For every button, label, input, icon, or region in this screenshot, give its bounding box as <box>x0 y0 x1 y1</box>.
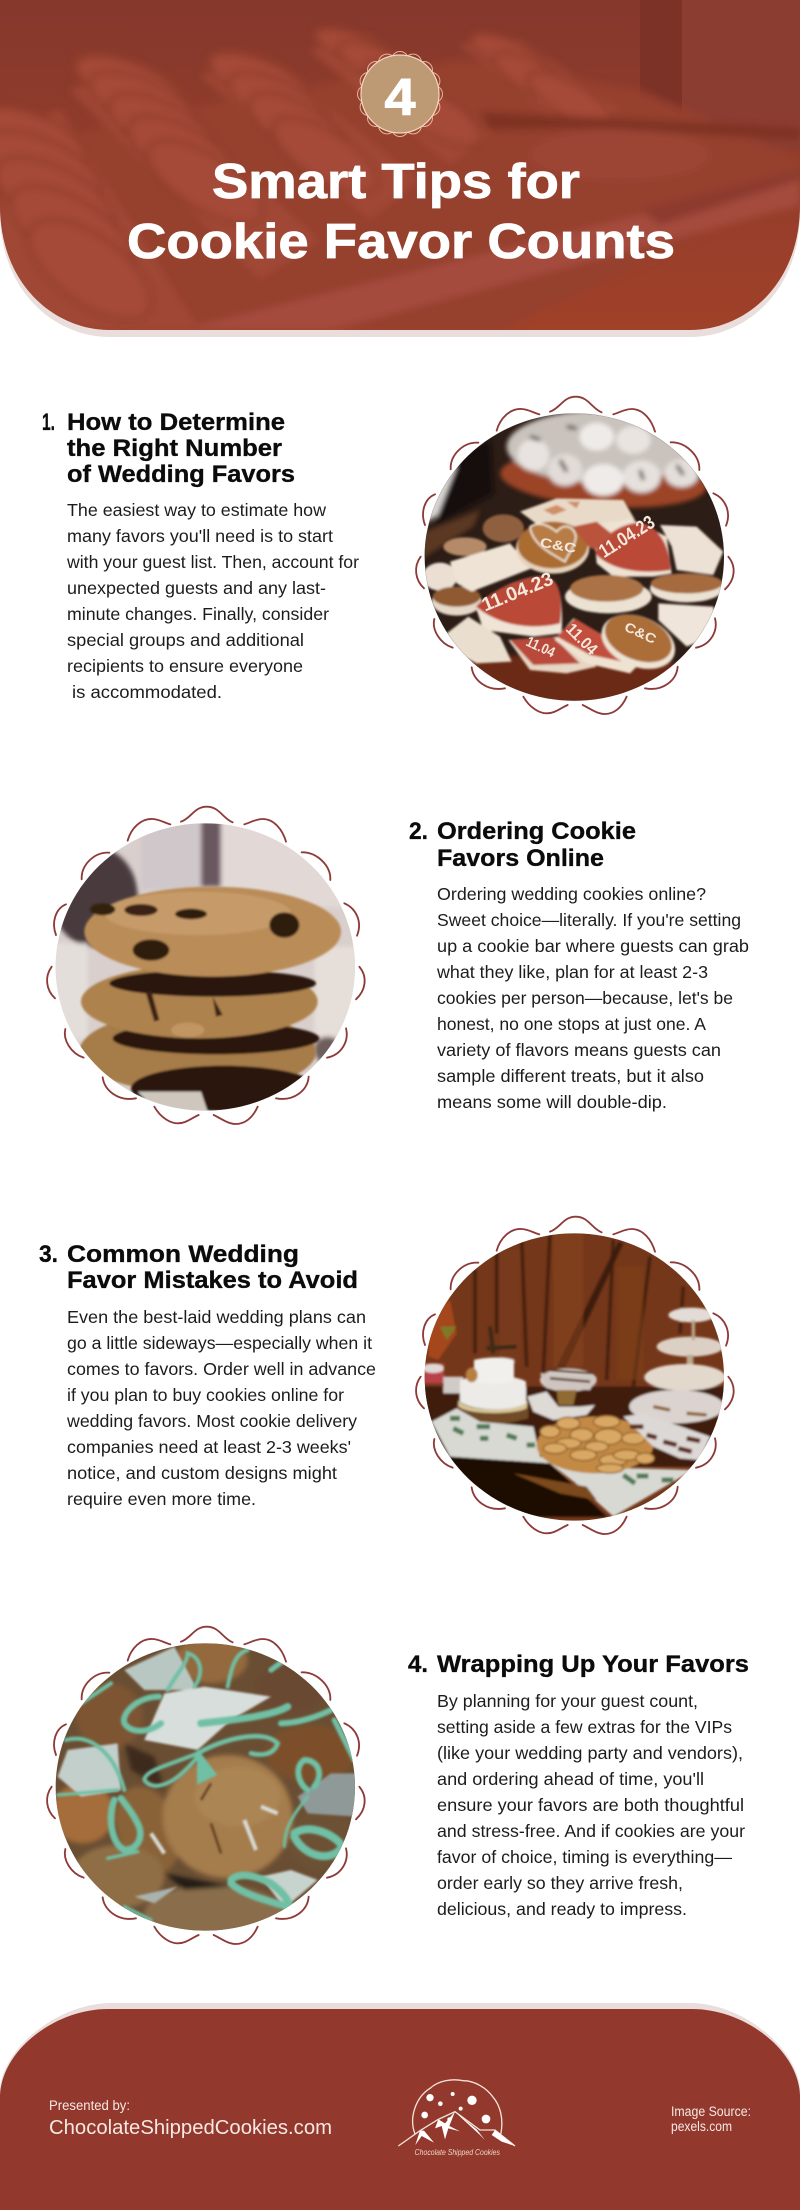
heading 4: 4. <box>408 1651 428 1678</box>
photo 1: decorated wedding cookies: 11.04 <box>523 634 558 662</box>
heading 1: of Wedding Favors <box>67 461 295 488</box>
body 3: require even more time. <box>67 1489 256 1509</box>
body 3: if you plan to buy cookies online for <box>67 1385 344 1405</box>
photo 3: wedding dessert table <box>416 1217 734 1534</box>
image source: Image Source: <box>671 2104 751 2119</box>
body 4: By planning for your guest count, <box>437 1691 698 1711</box>
photo 1: decorated wedding cookies: C&C <box>622 619 659 647</box>
body 2: variety of flavors means guests can <box>437 1040 721 1060</box>
body 1: The easiest way to estimate how <box>67 500 326 520</box>
body 1: is accommodated. <box>72 682 222 702</box>
photo 1: decorated wedding cookies <box>416 397 734 714</box>
body 2: honest, no one stops at just one. A <box>437 1014 706 1034</box>
section 2 text <box>409 818 749 1112</box>
section 1 text <box>42 409 359 702</box>
photo 1: decorated wedding cookies: 11.04.23 <box>479 569 557 616</box>
heading 1 <box>42 409 295 488</box>
body 4: ensure your favors are both thoughtful <box>437 1795 744 1815</box>
image source: pexels.com <box>671 2119 732 2134</box>
body 1 <box>66 500 359 702</box>
number badge: 4 <box>384 69 416 127</box>
footer <box>0 2003 800 2210</box>
heading 1: How to Determine <box>67 409 285 436</box>
body 4: (like your wedding party and vendors), <box>437 1743 743 1763</box>
heading 3: 3. <box>39 1241 58 1268</box>
body 3: go a little sideways—especially when it <box>67 1333 372 1353</box>
title <box>127 155 675 269</box>
body 1: recipients to ensure everyone <box>67 656 303 676</box>
body 4 <box>437 1691 745 1919</box>
body 1: with your guest list. Then, account for <box>66 552 359 572</box>
body 2: what they like, plan for at least 2-3 <box>436 962 708 982</box>
section 3 text <box>39 1241 376 1509</box>
body 4: favor of choice, timing is everything— <box>437 1847 732 1867</box>
title: Cookie Favor Counts <box>127 215 675 269</box>
number badge <box>358 52 442 136</box>
logo: Chocolate Shipped Cookies <box>398 2080 515 2157</box>
body 1: special groups and additional <box>67 630 304 650</box>
heading 4: Wrapping Up Your Favors <box>437 1651 749 1678</box>
body 4: and ordering ahead of time, you'll <box>437 1769 704 1789</box>
body 1: many favors you'll need is to start <box>67 526 333 546</box>
heading 2: Favors Online <box>437 845 604 872</box>
heading 1: 1. <box>42 409 55 436</box>
body 2: sample different treats, but it also <box>437 1066 704 1086</box>
heading 1: the Right Number <box>67 435 282 462</box>
body 4: delicious, and ready to impress. <box>437 1899 687 1919</box>
body 2 <box>436 884 749 1112</box>
photo 2: stack of chocolate chip cookies <box>47 807 365 1124</box>
body 4: order early so they arrive fresh, <box>437 1873 683 1893</box>
heading 2 <box>409 818 636 872</box>
heading 3: Favor Mistakes to Avoid <box>67 1267 358 1294</box>
body 1: unexpected guests and any last- <box>67 578 326 598</box>
image source <box>671 2104 751 2134</box>
presented by <box>49 2098 332 2139</box>
body 2: Sweet choice—literally. If you're setting <box>437 910 741 930</box>
photo 1: decorated wedding cookies: C&C <box>539 535 578 556</box>
photo 1: decorated wedding cookies: 11.04.23 <box>596 512 659 563</box>
body 4: and stress-free. And if cookies are your <box>437 1821 745 1841</box>
body 2: Ordering wedding cookies online? <box>437 884 706 904</box>
section 4 text <box>408 1651 749 1919</box>
body 3: comes to favors. Order well in advance <box>67 1359 376 1379</box>
header banner <box>0 0 800 340</box>
body 2: means some will double-dip. <box>437 1092 667 1112</box>
heading 3: Common Wedding <box>67 1241 299 1268</box>
body 3: wedding favors. Most cookie delivery <box>66 1411 357 1431</box>
body 2: up a cookie bar where guests can grab <box>437 936 749 956</box>
body 4: setting aside a few extras for the VIPs <box>437 1717 732 1737</box>
presented by: Presented by: <box>49 2098 130 2113</box>
body 3 <box>66 1307 376 1509</box>
logo: Chocolate Shipped Cookies: Chocolate Shipped Cookies <box>415 2148 500 2157</box>
photo 4: wrapped cookies with teal ribbons <box>47 1627 365 1944</box>
photo 1: decorated wedding cookies: 11.04 <box>562 619 602 659</box>
heading 2: 2. <box>409 818 428 845</box>
header background photo of cookies <box>0 0 800 340</box>
heading 2: Ordering Cookie <box>437 818 636 845</box>
presented by: ChocolateShippedCookies.com <box>49 2116 332 2139</box>
body 2: cookies per person—because, let's be <box>437 988 733 1008</box>
title: Smart Tips for <box>212 155 580 209</box>
body 3: notice, and custom designs might <box>67 1463 337 1483</box>
body 3: Even the best-laid wedding plans can <box>67 1307 366 1327</box>
body 1: minute changes. Finally, consider <box>67 604 329 624</box>
heading 3 <box>39 1241 358 1294</box>
body 3: companies need at least 2-3 weeks' <box>67 1437 351 1457</box>
